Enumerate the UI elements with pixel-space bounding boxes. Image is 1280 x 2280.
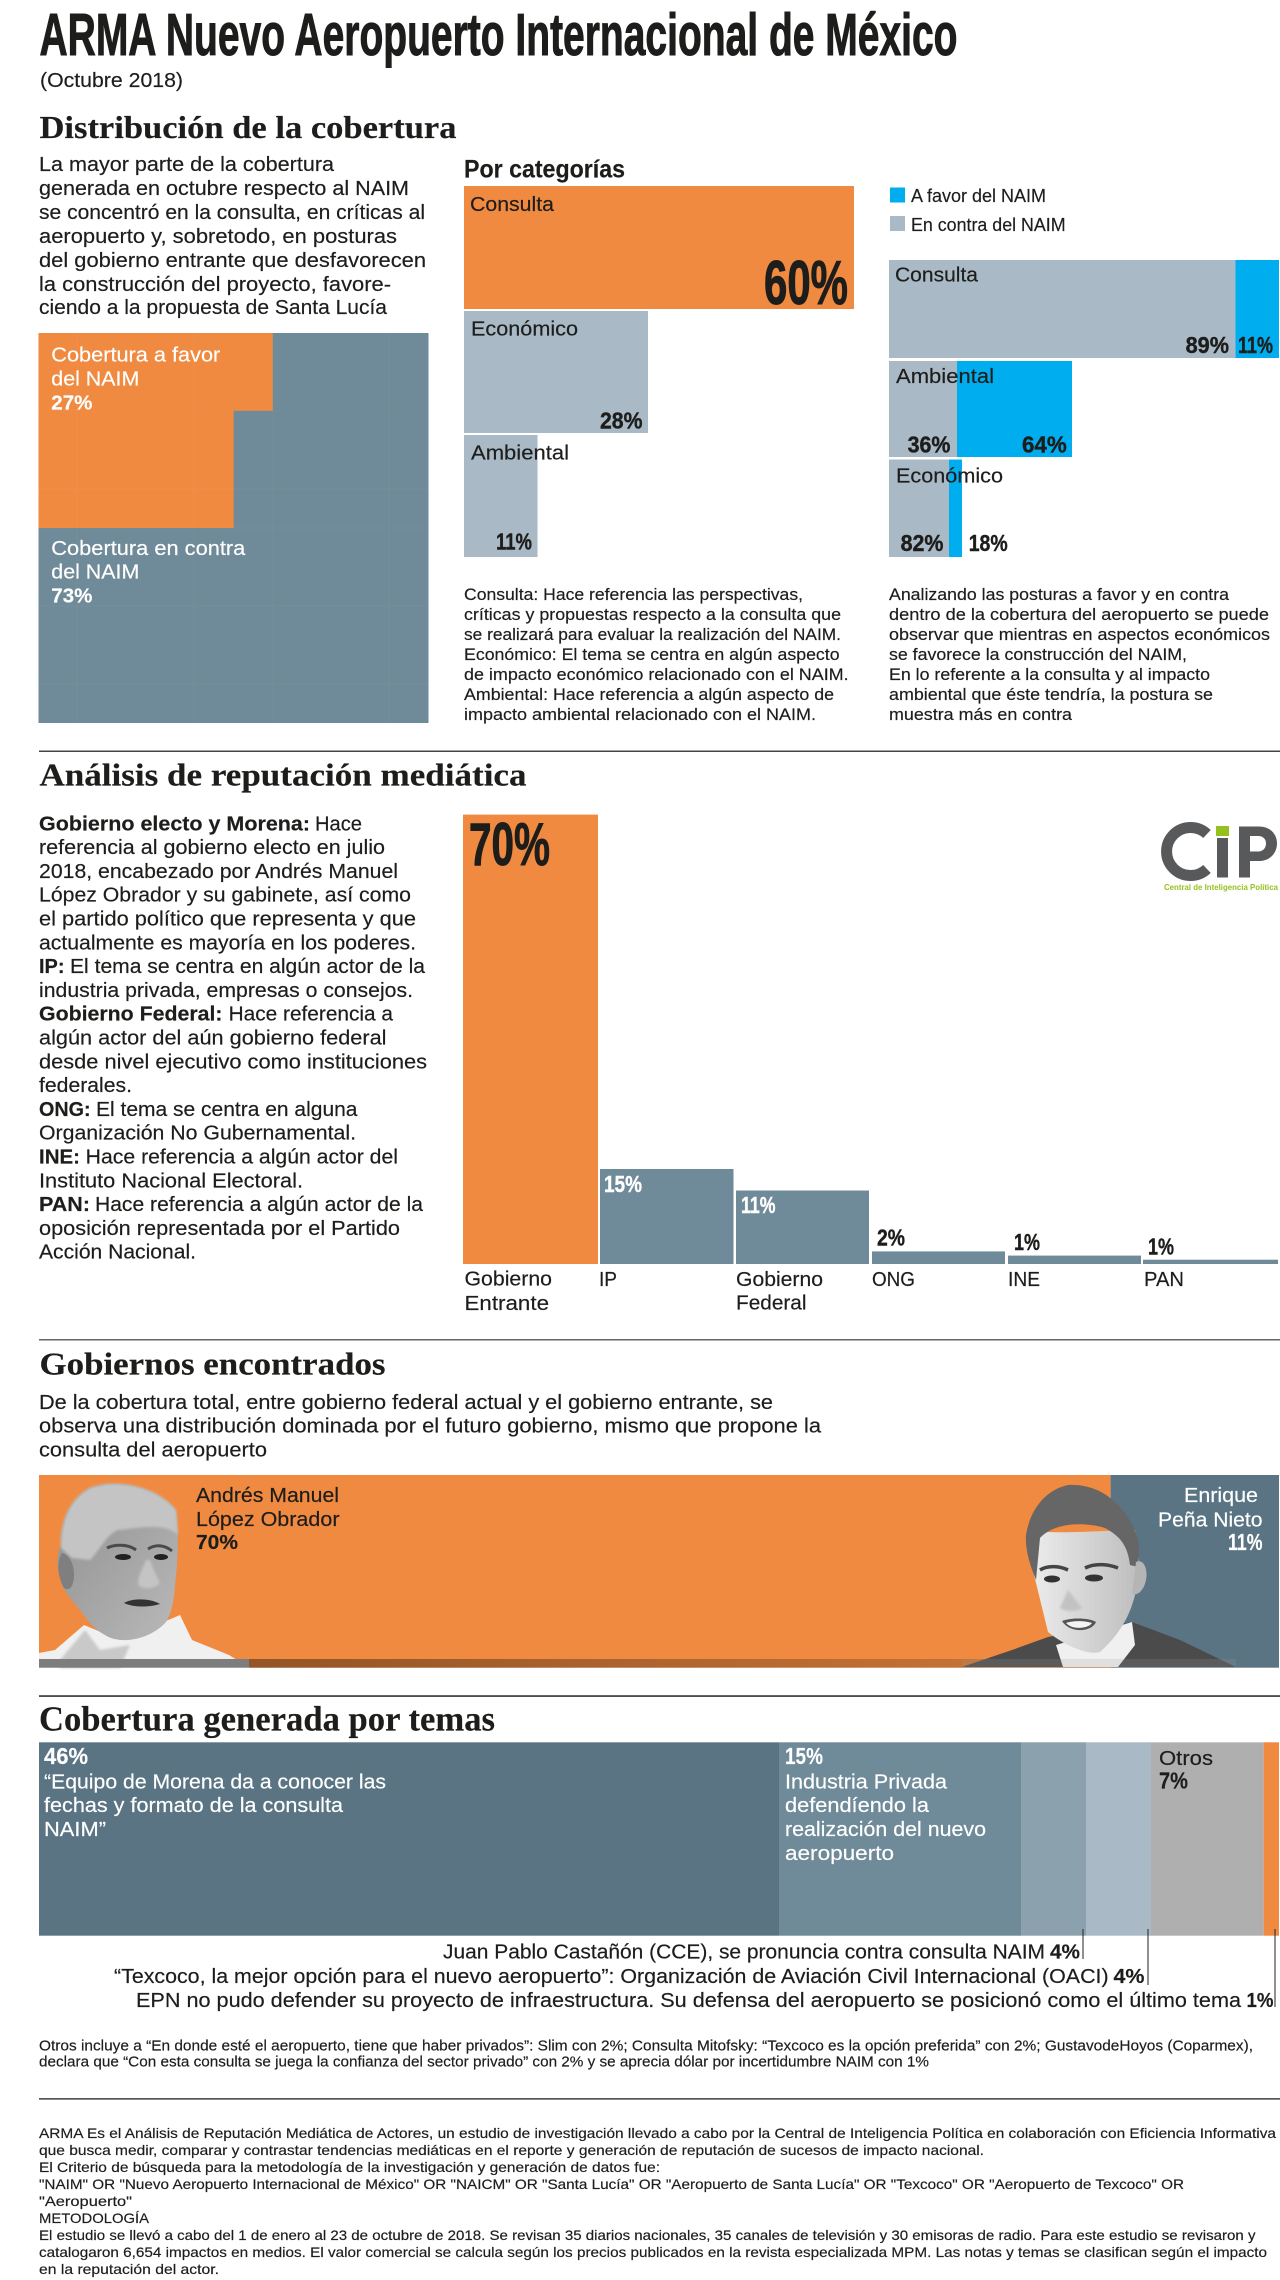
text block: definiciones de actores: industria privada, empresas o consejos. <box>39 979 413 1002</box>
text block: metodología: METODOLOGÍA <box>39 2210 150 2226</box>
text block: definiciones de actores: El tema se centra en algún actor de la <box>70 955 426 978</box>
label: a favor 27%: del NAIM <box>51 368 139 391</box>
treemap area: a favor <box>38 333 273 528</box>
heading: Cobertura generada por temas: Cobertura generada por temas <box>39 1700 495 1739</box>
segment: Otros 7% <box>1151 1742 1264 1936</box>
segment: 15% Industria Privada <box>779 1742 1021 1936</box>
text block: metodología: ARMA Es el Análisis de Reputación Mediática de Actores, un estudio de investigación llevado a cabo por la Central de Inteligencia Política en colaboración con Eficiencia Informativa <box>39 2125 1276 2141</box>
label: Peña Nieto 11% <box>1158 1484 1262 1555</box>
text block: definiciones de actores: algún actor del aún gobierno federal <box>39 1026 386 1050</box>
text block: análisis de posturas <box>889 585 1270 724</box>
bar: PAN 1%: PAN <box>1144 1268 1184 1291</box>
panel: gobiernos encontrados band <box>39 1475 1279 1668</box>
text block: definiciones de actores: López Obrador y su gabinete, así como <box>39 884 411 907</box>
text block: intro distribution: ciendo a la propuesta de Santa Lucía <box>39 296 388 319</box>
text block: definiciones de categorías: Consulta: Hace referencia las perspectivas, <box>464 585 803 604</box>
bar: Gobierno Federal 11% <box>736 1190 869 1315</box>
text block: intro distribution: La mayor parte de la cobertura <box>39 153 335 176</box>
legend item: en contra: En contra del NAIM <box>911 214 1066 235</box>
text block: definiciones de actores: Acción Nacional. <box>39 1241 196 1264</box>
bar: ONG 2%: 2% <box>877 1225 905 1251</box>
segment: 46% Equipo de Morena: NAIM” <box>44 1818 106 1841</box>
text block: intro distribution: se concentró en la consulta, en críticas al <box>39 201 425 224</box>
bar: Ambiental 11%: 11% <box>496 528 532 554</box>
segment: Otros 7%: Otros <box>1159 1747 1213 1770</box>
text block: metodología: en la reputación del actor. <box>39 2261 219 2277</box>
text block: intro distribution <box>39 153 426 319</box>
text block: análisis de posturas: muestra más en contra <box>889 705 1073 724</box>
text block: análisis de posturas: Analizando las posturas a favor y en contra <box>889 585 1230 604</box>
legend item: a favor: A favor del NAIM <box>911 185 1046 206</box>
text block: gobiernos intro: observa una distribución dominada por el futuro gobierno, mismo que propone la <box>39 1415 822 1438</box>
label: a favor 27% <box>51 344 220 414</box>
text block: definiciones de actores: referencia al gobierno electo en julio <box>39 836 385 859</box>
portrait: Enrique Peña Nieto <box>962 1485 1236 1668</box>
bar: ONG 2%: ONG <box>872 1268 915 1291</box>
text block: gobiernos intro: De la cobertura total, entre gobierno federal actual y el gobierno entrante, se <box>39 1391 773 1414</box>
text block: definiciones de categorías: impacto ambiental relacionado con el NAIM. <box>464 705 816 724</box>
segment: 46% Equipo de Morena: fechas y formato de la consulta <box>44 1794 344 1817</box>
text block: nota Otros: Otros incluye a “En donde esté el aeropuerto, tiene que haber privados”: Slim con 2%; Consulta Mitofsky: “Texcoco es la opción preferida” con 2%; GustavodeHoyos (Coparmex), <box>39 2038 1253 2055</box>
bar: Gobierno Federal 11%: 11% <box>741 1192 776 1218</box>
bar: INE 1%: INE <box>1008 1268 1040 1291</box>
bar: Consulta 89% / 11% <box>889 260 1279 358</box>
text block: definiciones de categorías: Ambiental: Hace referencia a algún aspecto de <box>464 685 834 704</box>
bar: Ambiental 36% / 64%: 36% <box>908 432 950 458</box>
text block: definiciones de actores: ONG: <box>39 1098 91 1121</box>
callout: 4% OACI: “Texcoco, la mejor opción para el nuevo aeropuerto”: Organización de Aviación Civil Internacional (OACI) <box>114 1965 1109 1988</box>
subtitle: date: (Octubre 2018) <box>40 70 183 92</box>
bar: Gobierno Federal 11%: Gobierno <box>736 1268 823 1291</box>
text block: análisis de posturas: dentro de la cobertura del aeropuerto se puede <box>889 605 1269 624</box>
heading: Gobiernos encontrados: Gobiernos encontrados <box>40 1345 386 1381</box>
segment: 4% OACI <box>1086 1742 1151 1936</box>
bar: Ambiental 36% / 64% <box>889 361 1072 458</box>
bar: Consulta 89% / 11%: 89% <box>1186 332 1229 358</box>
label: López Obrador 70% <box>196 1484 340 1554</box>
chart: categorías <box>464 186 854 557</box>
segment: 4% CCE <box>1021 1742 1086 1936</box>
heading: Por categorías: Por categorías <box>464 156 625 184</box>
text block: análisis de posturas: En lo referente a la consulta y al impacto <box>889 665 1210 684</box>
bar: Económico 82% / 18%: Económico <box>896 464 1003 488</box>
text block: nota Otros <box>39 2038 1253 2071</box>
text block: intro distribution: la construcción del proyecto, favore- <box>39 273 391 296</box>
text block: metodología: "NAIM" OR "Nuevo Aeropuerto Internacional de México" OR "NAICM" OR "Santa Lucía" OR "Aeropuerto de Santa Lucía" OR "Texcoco" OR "Aeropuerto de Texcoco" OR <box>39 2176 1184 2192</box>
text block: definiciones de categorías: se realizará para evaluar la realización del NAIM. <box>464 625 841 644</box>
callout: 4% CCE: Juan Pablo Castañón (CCE), se pronuncia contra consulta NAIM <box>443 1941 1045 1964</box>
text block: definiciones de categorías <box>464 585 849 724</box>
text block: definiciones de actores: 2018, encabezado por Andrés Manuel <box>39 860 398 883</box>
text block: intro distribution: aeropuerto y, sobretodo, en posturas <box>39 225 397 248</box>
text block: definiciones de actores: Hace referencia a algún actor de la <box>95 1193 424 1216</box>
segment: 46% Equipo de Morena <box>39 1742 779 1936</box>
segment: Otros 7%: 7% <box>1159 1768 1188 1794</box>
text block: metodología: catalogaron 6,654 impactos en medios. El valor comercial se calcula según los precios publicados en la revista especializada MPM. Las notas y temas se clasifican según el impacto <box>39 2244 1267 2260</box>
label: Peña Nieto 11%: 11% <box>1228 1529 1262 1555</box>
heading: Análisis de reputación mediática: Análisis de reputación mediática <box>40 756 526 792</box>
callout: 4% OACI <box>114 1929 1148 1988</box>
panel: treemap a favor / en contra <box>38 333 428 723</box>
text block: metodología: que busca medir, comparar y contrastar tendencias mediáticas en el reporte y generación de reputación de sucesos de impacto nacional. <box>39 2142 984 2158</box>
text block: definiciones de actores: Gobierno Federal: <box>39 1003 222 1026</box>
bar: Gobierno Entrante 70%: Gobierno <box>464 1268 552 1291</box>
segment: 15% Industria Privada: aeropuerto <box>785 1842 894 1865</box>
legend <box>890 185 1066 235</box>
text block: definiciones de actores: Organización No Gubernamental. <box>39 1122 356 1145</box>
label: López Obrador 70%: Andrés Manuel <box>196 1484 339 1507</box>
text block: definiciones de actores: Hace referencia a <box>229 1003 394 1026</box>
label: a favor 27%: Cobertura a favor <box>51 344 220 367</box>
bar: Económico 82% / 18%: 82% <box>901 530 944 556</box>
bar: PAN 1% <box>1143 1234 1278 1291</box>
bar: Económico 28% <box>464 311 648 434</box>
text block: definiciones de categorías: críticas y propuestas respecto a la consulta que <box>464 605 841 624</box>
text block: definiciones de actores: Instituto Nacional Electoral. <box>39 1169 303 1192</box>
bar: Gobierno Federal 11%: Federal <box>736 1292 806 1315</box>
text block: definiciones de actores: INE: <box>39 1146 80 1168</box>
logo: CIP <box>1164 826 1278 892</box>
bar: IP 15% <box>599 1169 734 1291</box>
text block: definiciones de categorías: de impacto económico relacionado con el NAIM. <box>464 665 849 684</box>
bar: Ambiental 11%: Ambiental <box>471 442 569 465</box>
bar: Gobierno Entrante 70% <box>463 811 598 1315</box>
text block: definiciones de actores: Hace referencia a algún actor del <box>86 1146 398 1168</box>
text block: metodología <box>39 2125 1276 2277</box>
bar: Económico 82% / 18% <box>889 460 1008 557</box>
callout: 1% EPN: EPN no pudo defender su proyecto de infraestructura. Su defensa del aeropuerto se posicionó como el último tema <box>136 1989 1242 2012</box>
segment: 15% Industria Privada: realización del nuevo <box>785 1818 986 1841</box>
bar: Gobierno Entrante 70%: 70% <box>469 811 550 878</box>
text block: intro distribution: generada en octubre respecto al NAIM <box>39 177 409 200</box>
bar: Consulta 60%: Consulta <box>470 193 555 216</box>
callout: 4% CCE: 4% <box>1050 1941 1080 1964</box>
text block: metodología: El estudio se llevó a cabo del 1 de enero al 23 de octubre de 2018. Se revisan 35 diarios nacionales, 35 canales de televisión y 30 emisoras de radio. Para este estudio se revisaron y <box>39 2227 1256 2243</box>
text block: definiciones de actores: oposición representada por el Partido <box>39 1217 400 1240</box>
text block: definiciones de actores: IP: <box>39 955 64 978</box>
segment: 46% Equipo de Morena: “Equipo de Morena da a conocer las <box>44 1771 386 1794</box>
bar: Consulta 60%: 60% <box>764 249 848 318</box>
text block: definiciones de categorías: Económico: El tema se centra en algún aspecto <box>464 645 840 664</box>
callout: 4% CCE <box>443 1929 1084 1964</box>
bar: IP 15%: IP <box>599 1268 617 1291</box>
bar: Consulta 89% / 11%: Consulta <box>895 264 979 287</box>
label: Peña Nieto 11%: Peña Nieto <box>1158 1509 1262 1532</box>
chart: a favor y en contra por categoría <box>889 260 1279 557</box>
bar: Económico 28%: Económico <box>471 318 578 341</box>
label: Peña Nieto 11%: Enrique <box>1184 1484 1258 1507</box>
callout: 1% EPN <box>136 1929 1276 2012</box>
label: en contra 73%: Cobertura en contra <box>51 537 246 560</box>
callout: 4% OACI: 4% <box>1114 1965 1144 1988</box>
segment: 15% Industria Privada: defendíendo la <box>785 1794 930 1817</box>
bar: INE 1% <box>1008 1229 1141 1291</box>
label: a favor 27%: 27% <box>51 391 92 414</box>
heading: Distribución de la cobertura: Distribución de la cobertura <box>40 109 456 145</box>
bar: Ambiental 36% / 64%: 64% <box>1022 432 1067 458</box>
text block: definiciones de actores: actualmente es mayoría en los poderes. <box>39 931 416 954</box>
text block: gobiernos intro: consulta del aeropuerto <box>39 1439 267 1462</box>
label: López Obrador 70%: López Obrador <box>196 1508 340 1531</box>
bar: INE 1%: 1% <box>1014 1229 1040 1255</box>
segment: 46% Equipo de Morena: 46% <box>44 1743 88 1769</box>
text block: definiciones de actores: el partido político que representa y que <box>39 908 416 930</box>
bar: PAN 1%: 1% <box>1148 1234 1174 1260</box>
label: en contra 73%: 73% <box>51 585 92 608</box>
text block: definiciones de actores: PAN: <box>39 1193 90 1216</box>
text block: intro distribution: del gobierno entrante que desfavorecen <box>39 249 426 272</box>
bar: Ambiental 11% <box>464 435 569 557</box>
text block: análisis de posturas: observar que mientras en aspectos económicos <box>889 625 1270 644</box>
label: en contra 73%: del NAIM <box>51 561 139 584</box>
bar: Gobierno Entrante 70%: Entrante <box>464 1292 549 1315</box>
treemap area: en contra <box>38 333 428 723</box>
text block: nota Otros: declara que “Con esta consulta se juega la confianza del sector privado” con 2% y se aprecia dólar por incertidumbre NAIM con 1% <box>39 2054 929 2071</box>
portrait: Andrés Manuel López Obrador <box>39 1484 250 1668</box>
text block: análisis de posturas: se favorece la construcción del NAIM, <box>889 645 1187 664</box>
label: López Obrador 70%: 70% <box>196 1531 238 1554</box>
segment: 1% EPN <box>1264 1742 1279 1936</box>
segment: 15% Industria Privada: Industria Privada <box>785 1771 948 1794</box>
bar chart: reputación mediática <box>463 811 1278 1315</box>
text block: definiciones de actores: federales. <box>39 1074 132 1097</box>
text block: análisis de posturas: ambiental que éste tendría, la postura se <box>889 685 1213 704</box>
text block: definiciones de actores: desde nivel ejecutivo como instituciones <box>39 1050 427 1073</box>
segment: 15% Industria Privada: 15% <box>785 1743 823 1769</box>
bar: Consulta 60% <box>464 186 854 318</box>
text block: metodología: El Criterio de búsqueda para la metodología de la investigación y generación de datos fue: <box>39 2159 660 2175</box>
bar: ONG 2% <box>872 1225 1005 1291</box>
text block: definiciones de actores: Hace <box>315 812 362 835</box>
callout: 1% EPN: 1% <box>1246 1989 1274 2012</box>
chart: temas stacked band <box>39 1742 1279 1936</box>
bar: Económico 28%: 28% <box>600 408 642 434</box>
label: en contra 73% <box>51 537 246 608</box>
text block: metodología: "Aeropuerto" <box>39 2193 132 2209</box>
bar: IP 15%: 15% <box>604 1171 642 1197</box>
text block: definiciones de actores <box>39 812 427 1264</box>
bar: Económico 82% / 18%: 18% <box>969 530 1008 556</box>
bar: Ambiental 36% / 64%: Ambiental <box>896 365 994 388</box>
text block: definiciones de actores: Gobierno electo y Morena: <box>39 812 310 835</box>
text block: gobiernos intro <box>39 1391 822 1462</box>
text block: definiciones de actores: El tema se centra en alguna <box>96 1098 358 1121</box>
